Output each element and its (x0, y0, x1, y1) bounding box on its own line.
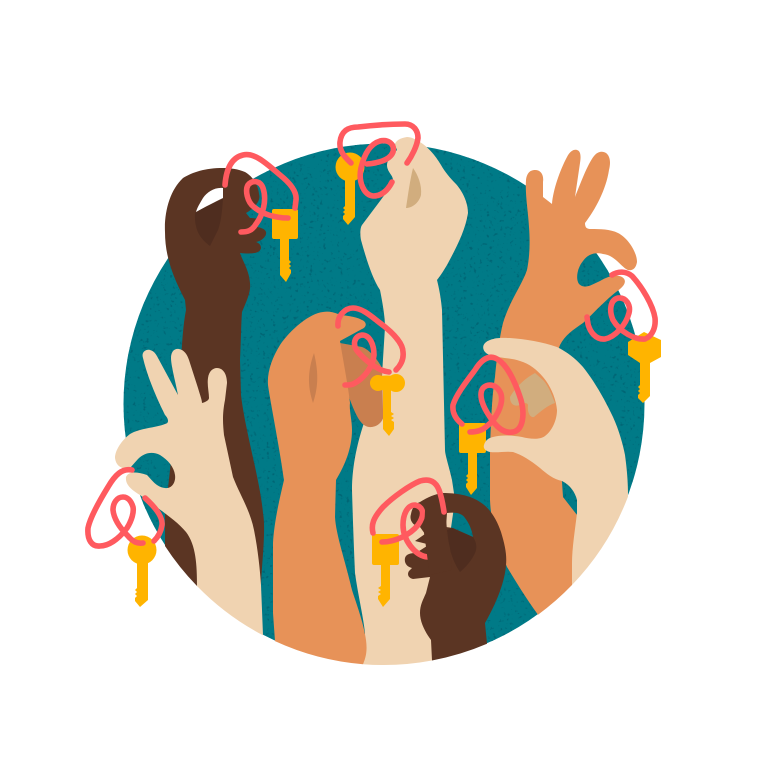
key ring: right (587, 272, 655, 339)
hand: dark brown raised hand, top left (165, 168, 266, 600)
key: square head, centre right (459, 423, 486, 495)
hand: light OK-sign hand, lower left (115, 349, 263, 635)
background circle (124, 144, 644, 664)
key ring: bottom centre, large loop (372, 480, 444, 533)
key: round head, lower left (128, 536, 156, 607)
key: square head, top left (272, 209, 298, 282)
thumb over key ring, bottom centre (424, 503, 452, 575)
hand: light pinching hand, right (483, 338, 628, 585)
hand: orange OK-sign hand, right (490, 150, 637, 615)
key: lobed head, centre (370, 374, 405, 436)
hand: orange fist, centre (268, 312, 384, 664)
hand: dark brown hand, bottom centre (405, 493, 506, 660)
key: round head, top centre (336, 152, 364, 225)
key ring: top left (225, 155, 296, 232)
key ring: centre (338, 308, 403, 385)
key ring: lower left (88, 470, 162, 546)
key: square head, bottom centre (372, 534, 399, 607)
key ring: bottom centre, small loop (382, 505, 428, 557)
key ring: top centre (340, 124, 418, 196)
hand: light raised arm, top centre (352, 137, 468, 665)
key ring: centre right (453, 357, 523, 432)
key: hexagonal head, right (628, 332, 661, 403)
illustration: hands holding keys over a teal circle (85, 121, 661, 665)
speckle texture (123, 143, 645, 665)
